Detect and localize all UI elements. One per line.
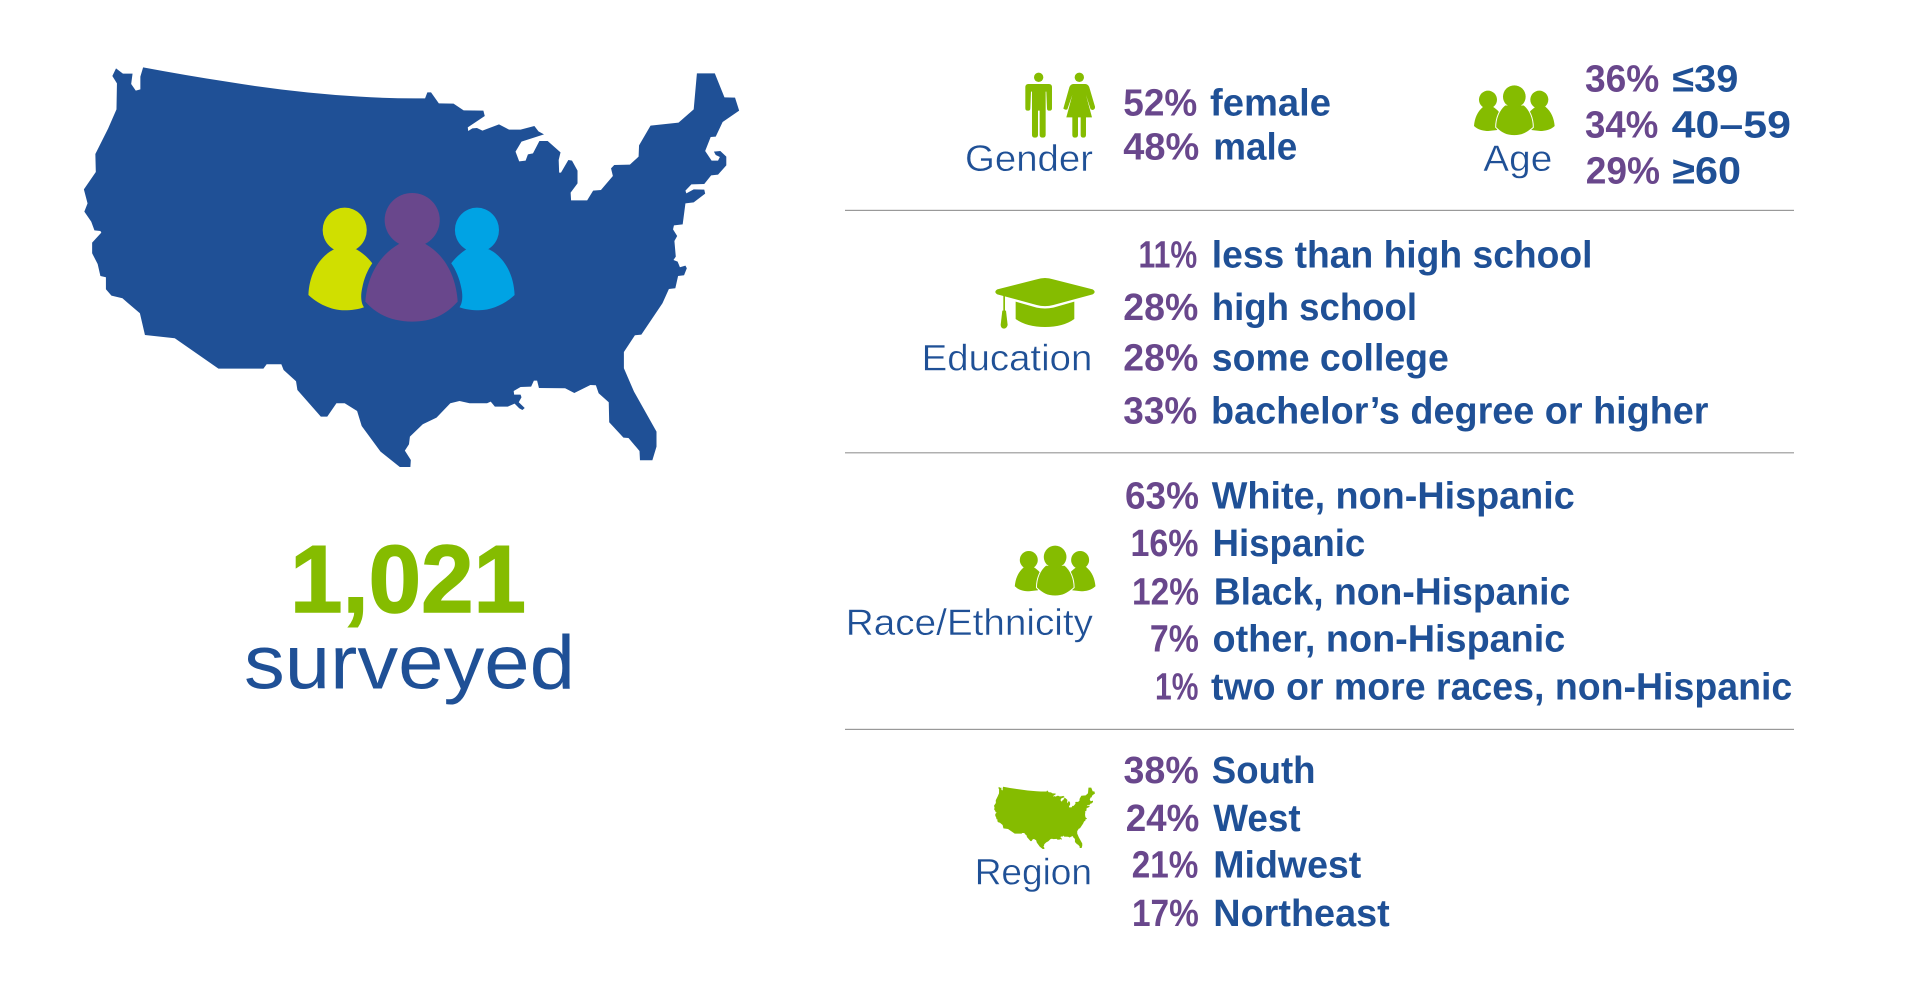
race/ethnicity stats: Black, non-Hispanic [1214, 571, 1570, 613]
region stats: Northeast [1213, 893, 1390, 935]
race/ethnicity stats: 7% [1150, 619, 1199, 661]
label: gender: Gender [965, 138, 1093, 179]
education stats [1123, 235, 1709, 432]
region stats: South [1212, 750, 1316, 792]
education stats: 28% [1123, 338, 1198, 380]
label: age: Age [1483, 138, 1552, 179]
race/ethnicity stats: 1% [1155, 666, 1198, 708]
gender stats [1123, 82, 1331, 168]
education stats: 11% [1138, 235, 1197, 277]
region stats [1124, 750, 1390, 935]
icon: graduation cap [995, 278, 1095, 329]
education stats: some college [1212, 338, 1449, 380]
education stats: bachelor’s degree or higher [1211, 390, 1709, 432]
age stats: 40–59 [1672, 104, 1791, 146]
education stats: 33% [1123, 390, 1197, 432]
region stats: 17% [1132, 893, 1199, 935]
age stats [1585, 58, 1791, 192]
region stats: 38% [1124, 750, 1199, 792]
icon: race/ethnicity group [1015, 546, 1095, 596]
gender stats: female [1210, 82, 1331, 124]
age stats: 34% [1585, 104, 1658, 146]
label: region: Region [975, 851, 1092, 892]
race/ethnicity stats: 12% [1132, 571, 1199, 613]
race/ethnicity stats: 63% [1125, 475, 1199, 517]
education stats: 28% [1123, 287, 1198, 329]
icon: small US map [994, 787, 1095, 849]
race/ethnicity stats [1125, 475, 1792, 708]
label: race/ethnicity: Race/Ethnicity [846, 602, 1094, 643]
region stats: 21% [1132, 845, 1198, 887]
total count: 1,021 [290, 526, 526, 633]
education stats: less than high school [1212, 235, 1592, 277]
age stats: 36% [1585, 58, 1659, 100]
icon: gender [1025, 73, 1095, 138]
gender stats: 48% [1123, 126, 1199, 168]
US map [84, 67, 739, 467]
education stats: high school [1212, 287, 1417, 329]
race/ethnicity stats: Hispanic [1212, 523, 1365, 565]
race/ethnicity stats: other, non-Hispanic [1212, 619, 1565, 661]
race/ethnicity stats: 16% [1130, 523, 1198, 565]
icon: three people [308, 193, 515, 322]
gender stats: 52% [1123, 82, 1197, 124]
race/ethnicity stats: two or more races, non-Hispanic [1211, 666, 1792, 708]
race/ethnicity stats: White, non-Hispanic [1212, 475, 1575, 517]
gender stats: male [1213, 126, 1297, 168]
icon: age group [1474, 85, 1555, 136]
panel: US map with people [84, 67, 739, 467]
age stats: ≤39 [1672, 58, 1738, 100]
region stats: Midwest [1213, 845, 1362, 887]
region stats: 24% [1126, 798, 1199, 840]
region stats: West [1213, 798, 1301, 840]
surveyed label: surveyed [244, 620, 575, 705]
age stats: 29% [1586, 150, 1660, 192]
label: education: Education [922, 338, 1092, 379]
age stats: ≥60 [1672, 150, 1741, 192]
